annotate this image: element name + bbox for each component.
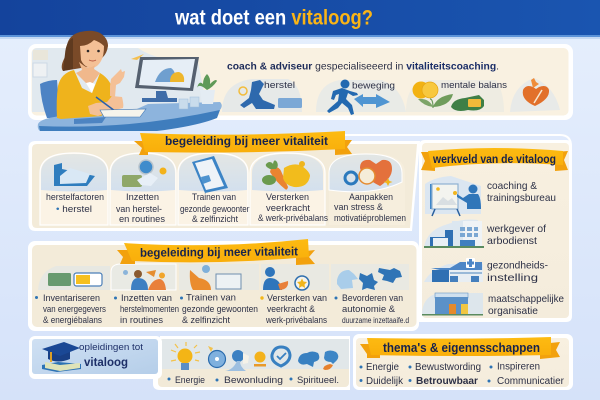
text: [334, 192, 406, 224]
panel: werkveld: [345, 134, 572, 322]
hair: [62, 31, 108, 71]
panel: begeleiding cards: [28, 141, 420, 231]
arms: [88, 96, 123, 116]
text: motivatiéproblemen: [334, 213, 406, 224]
text: coaching &: [487, 180, 537, 192]
banner: thema's & eigennsschappen: [383, 341, 540, 355]
panel: inventariseren cards: [28, 241, 419, 331]
text: [116, 192, 165, 225]
card: herstelmomenten: [111, 264, 179, 326]
text: Versterken van: [267, 293, 327, 304]
card: veerkracht: [260, 264, 329, 326]
text: [486, 223, 546, 247]
text: herstelfactoren: [46, 192, 104, 203]
chair: [40, 80, 60, 118]
text: van stress &: [334, 202, 384, 213]
card: autonomie: [331, 264, 409, 325]
label: mentale balans: mentale balans: [441, 80, 507, 91]
list: Betrouwbaar: [416, 376, 478, 387]
text: [487, 260, 548, 284]
list: Inspireren: [497, 362, 540, 372]
text: gezonde gewoonten: [182, 304, 258, 315]
text: opleidingen tot: [79, 342, 143, 353]
banner: werkveld: werkveld van de vitaloog: [432, 154, 556, 166]
text: [258, 192, 328, 224]
text: veerkracht: [266, 203, 310, 214]
notebook: [100, 109, 146, 117]
text: trainingsbureau: [487, 192, 556, 204]
text: & zelfinzicht: [182, 315, 230, 326]
header band: [0, 0, 600, 39]
text: arbodienst: [487, 235, 537, 247]
banner: [360, 337, 560, 359]
text: instelling: [487, 272, 538, 284]
list: [360, 362, 565, 387]
text: [180, 292, 258, 326]
text: Versterken: [266, 192, 309, 203]
labels row: Spiritueel.: [297, 375, 339, 386]
item: gezondheidsinstelling: [424, 258, 548, 284]
text: organisatie: [488, 305, 538, 317]
text: Trainen van: [186, 292, 236, 304]
panel: thema's & eigenschappen: [353, 334, 573, 390]
text: veerkracht &: [267, 304, 316, 315]
list: Energie: [366, 362, 399, 373]
list: Duidelijk: [366, 376, 404, 387]
item: coaching: [425, 176, 556, 216]
card: inventariseren: [35, 266, 110, 326]
icon: graduation cap: [42, 342, 81, 372]
item: maatschappelijke organisatie: [422, 293, 564, 317]
labels row: Energie: [175, 375, 205, 386]
text: gezonde gewoonten: [180, 204, 251, 215]
monitor: [135, 57, 199, 91]
text: vitaloog: [84, 357, 128, 369]
text: Bevorderen van: [342, 293, 403, 304]
icon: beweging: [316, 80, 406, 115]
text: van energegevers: [43, 304, 106, 315]
bullet text: • herstel: [56, 204, 92, 215]
icon: heart: [510, 78, 560, 112]
text: werk-privébalans: [265, 315, 327, 326]
text: [35, 293, 106, 326]
card: versterken: [250, 153, 328, 225]
text: Inzetten: [126, 192, 159, 203]
banner: werkveld: [421, 148, 568, 171]
card: inzetten: [110, 153, 176, 225]
face and neck: [80, 40, 104, 68]
card: trainen: [178, 153, 251, 225]
text: Trainen van: [192, 192, 236, 203]
text: Inventariseren: [43, 293, 100, 304]
icon: herstel: [222, 79, 302, 112]
label: herstel: herstel: [264, 80, 295, 91]
text: [114, 293, 179, 326]
text: [79, 342, 143, 369]
text: maatschappelijke: [488, 293, 564, 305]
panel: opleidingen: [29, 336, 162, 379]
text: [260, 293, 327, 326]
banner: begeleiding 1: [134, 131, 352, 155]
illustration: coach at desk: [38, 31, 222, 131]
text: duurzame inzettaaife.d: [342, 316, 409, 325]
list: Communicatier: [497, 376, 565, 387]
label: beweging: beweging: [352, 80, 395, 92]
text: [180, 192, 251, 225]
text: autonomie &: [342, 304, 396, 315]
panel: thema icons: [153, 336, 350, 390]
text: [487, 180, 556, 204]
panel: hero intro: [28, 31, 573, 131]
text: & zelfinzicht: [192, 214, 238, 225]
card: herstelfactoren: [40, 153, 108, 225]
text: & werk-privébalans: [258, 213, 328, 224]
banner: begeleiding 1: begeleiding bij meer vitaliteit: [165, 134, 328, 148]
icon: mentale balans: [406, 80, 507, 112]
list: Bewustwording: [415, 362, 481, 373]
card: gezonde gewoonten: [179, 264, 259, 326]
text: intro sentence: coach & adviseur gespecialiseeerd in vitaliteitscoaching.: [227, 60, 499, 72]
item: werkgever: [424, 220, 546, 248]
text: gezondheids-: [487, 260, 548, 272]
text: & energiébalans: [43, 315, 102, 326]
text: werkgever of: [486, 223, 546, 235]
text: [334, 293, 409, 325]
card: aanpakken: [329, 153, 406, 225]
labels row: Bewonluding: [224, 375, 283, 386]
text: Aanpakken: [349, 192, 393, 203]
text: herstelmomenten: [120, 304, 179, 314]
shirt: [57, 70, 114, 119]
text: [488, 293, 564, 317]
text: en routines: [119, 214, 165, 225]
text: van herstel-: [116, 204, 162, 215]
banner: begeleiding 2: begeleiding bij meer vitaliteit: [140, 244, 298, 260]
desk: [38, 102, 222, 131]
banner: begeleiding 2: [117, 239, 315, 265]
icons row: [171, 342, 338, 371]
title: wat doet een vitaloog?: [174, 6, 373, 30]
text: Inzetten van: [121, 293, 172, 304]
labels row: [168, 375, 339, 386]
text: in routines: [120, 315, 163, 326]
